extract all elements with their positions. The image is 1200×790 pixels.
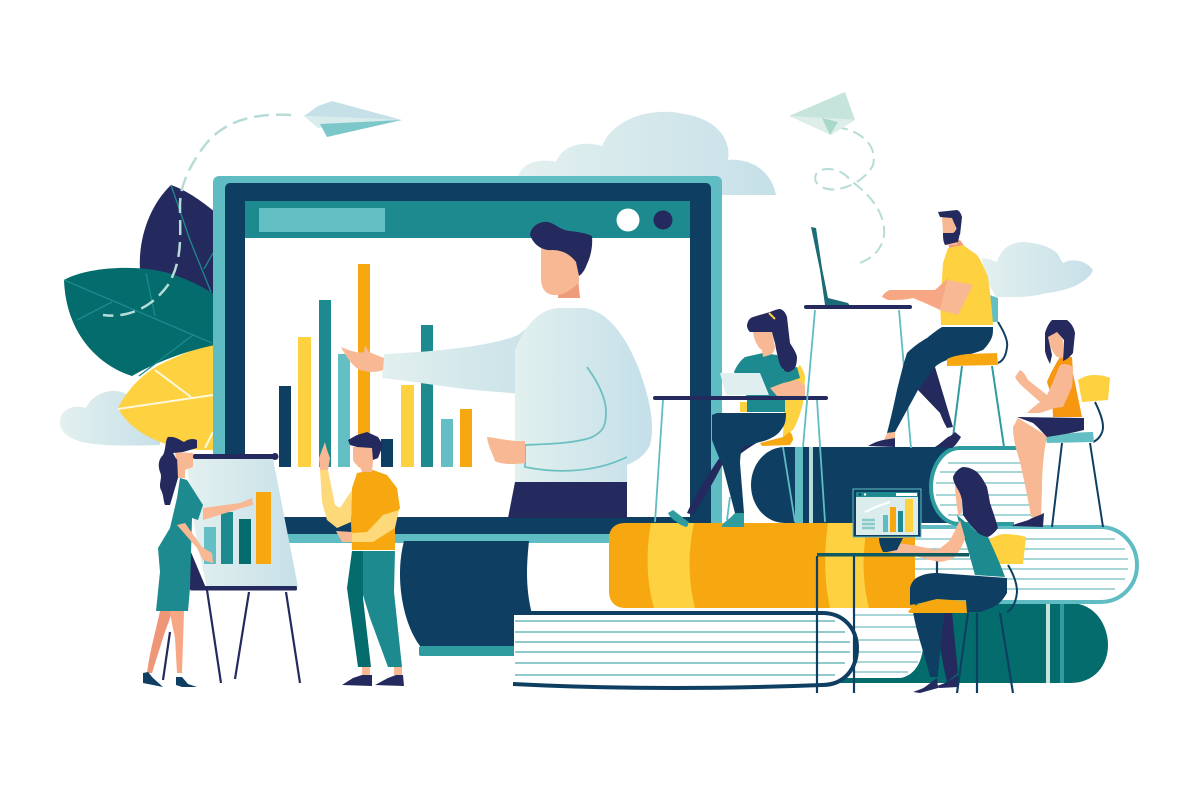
ankles [884, 432, 895, 440]
hair [1045, 320, 1075, 364]
screen white content [245, 238, 690, 517]
chair back [988, 534, 1026, 564]
neck and face [353, 447, 373, 472]
laptop screen [811, 227, 850, 306]
shoes [143, 672, 163, 687]
presenter face [541, 244, 579, 295]
presenter sweater [515, 308, 652, 482]
shoes [668, 510, 689, 527]
teal outlined book on the right [905, 527, 1137, 602]
white gap below the screen frame on the left [205, 456, 250, 551]
trouser light leg [363, 551, 402, 667]
arm [770, 380, 805, 397]
flipchart rear leg [163, 632, 170, 680]
stool legs [953, 366, 1004, 447]
neck [948, 240, 965, 250]
beard [943, 227, 960, 245]
front leg and thigh [887, 327, 993, 433]
screen header [245, 201, 690, 238]
face [1048, 331, 1063, 358]
shirt [734, 353, 800, 412]
presenter hair [530, 222, 592, 276]
stool seat [947, 353, 998, 366]
dress [156, 478, 203, 611]
paper plane: right [789, 92, 855, 135]
rear leg [147, 611, 172, 673]
lower arm [177, 523, 213, 563]
seat [1045, 432, 1094, 443]
screen outer frame [213, 176, 722, 543]
orange book [609, 523, 915, 608]
presenter trousers [508, 482, 627, 518]
small computer monitor with chart [853, 489, 921, 537]
arm [1015, 364, 1073, 413]
skirt [1017, 417, 1084, 437]
trouser dark leg [347, 551, 371, 667]
open pages book: bottom front [513, 613, 857, 688]
woman at flipchart [143, 437, 253, 687]
desk and chair legs [655, 400, 825, 522]
arm to the chart [203, 498, 253, 520]
flipchart bars [204, 492, 271, 564]
teal outlined book with pages at the top of the stack [931, 448, 1040, 524]
shirt [957, 515, 1005, 577]
chair support [1007, 565, 1017, 612]
chair back [982, 295, 998, 322]
rear leg [687, 442, 758, 515]
desk top [653, 396, 828, 400]
chair seat [760, 432, 793, 446]
navy book under the screen [400, 541, 532, 656]
flipchart back panel [188, 545, 206, 589]
woman on the right stool [1012, 320, 1110, 527]
orange top [1047, 357, 1082, 417]
raised sleeve [320, 470, 352, 528]
front leg [170, 611, 184, 673]
front leg and thigh [712, 413, 786, 513]
screen inner frame [225, 183, 711, 534]
dashed flight path: left paper plane [103, 115, 291, 316]
yellow chair edge left [740, 402, 747, 412]
leaves behind the screen [64, 185, 215, 450]
chair support [1093, 402, 1103, 442]
hair [938, 210, 962, 235]
shoes [913, 678, 938, 693]
woman with laptop [653, 309, 828, 527]
presenter [341, 222, 652, 518]
thigh [910, 573, 1007, 612]
laptop [720, 373, 769, 395]
forearm [882, 278, 948, 310]
leaf: yellow [118, 340, 215, 450]
presenter neck [558, 278, 580, 298]
boy in orange shirt [319, 432, 404, 686]
leaf: navy [140, 185, 215, 300]
ankles [362, 667, 402, 675]
desk top [804, 305, 912, 309]
shoe [1012, 513, 1044, 527]
orange shirt [351, 470, 400, 550]
flipchart [163, 453, 300, 683]
paper plane: left [304, 101, 402, 137]
presenter pointing hand [341, 345, 384, 372]
window button navy [654, 210, 672, 230]
face [955, 483, 962, 515]
neck and face [175, 452, 193, 478]
legs [1013, 418, 1047, 517]
woman at computer, lower right [817, 467, 1026, 693]
hair [159, 437, 197, 505]
bottom right green book [840, 603, 1108, 683]
yellow shirt [940, 245, 993, 325]
hair band [769, 313, 775, 319]
cloud: right [982, 242, 1093, 297]
window button white [616, 208, 640, 232]
face [753, 332, 775, 357]
cloud: top behind screen [518, 112, 776, 195]
seat [908, 599, 967, 613]
chair back [1078, 375, 1110, 402]
navy book on the top stack [751, 447, 950, 523]
front leg [913, 612, 945, 677]
crossed arm [352, 510, 399, 542]
arm [887, 520, 965, 562]
shoes [868, 438, 895, 447]
chair support [998, 322, 1007, 363]
screen title bar [259, 208, 385, 232]
leaf veins: yellow [118, 370, 213, 448]
presenter arm [382, 318, 540, 395]
rear leg [937, 612, 958, 682]
face [942, 217, 957, 245]
presenter lower hand [487, 437, 525, 464]
stool legs [1052, 443, 1103, 527]
flipchart legs [207, 590, 300, 683]
hair [348, 432, 383, 460]
leaf: green [64, 268, 215, 376]
flipchart sheet [188, 459, 298, 587]
shoes [342, 675, 372, 686]
cloud: left [60, 391, 160, 446]
large screen [205, 176, 722, 551]
bearded man at standing desk [803, 210, 1007, 448]
flipchart top rod [193, 453, 278, 460]
desk legs [803, 310, 911, 448]
chair back [783, 365, 805, 437]
hair [953, 467, 998, 537]
dashed flight path: right paper plane [815, 127, 884, 263]
desk top [817, 553, 969, 556]
desk legs [817, 556, 937, 693]
raised hand [319, 442, 330, 470]
bar chart on screen [279, 264, 472, 467]
rear leg [918, 367, 953, 428]
flipchart base rail [190, 586, 297, 590]
leaf veins: dark [64, 185, 213, 376]
presenter sleeve outline [525, 367, 627, 471]
upper arm [940, 280, 973, 315]
chair legs [957, 613, 1013, 693]
hair and ponytail [747, 309, 797, 372]
crossed hand [336, 531, 352, 542]
computer stand [879, 538, 903, 552]
